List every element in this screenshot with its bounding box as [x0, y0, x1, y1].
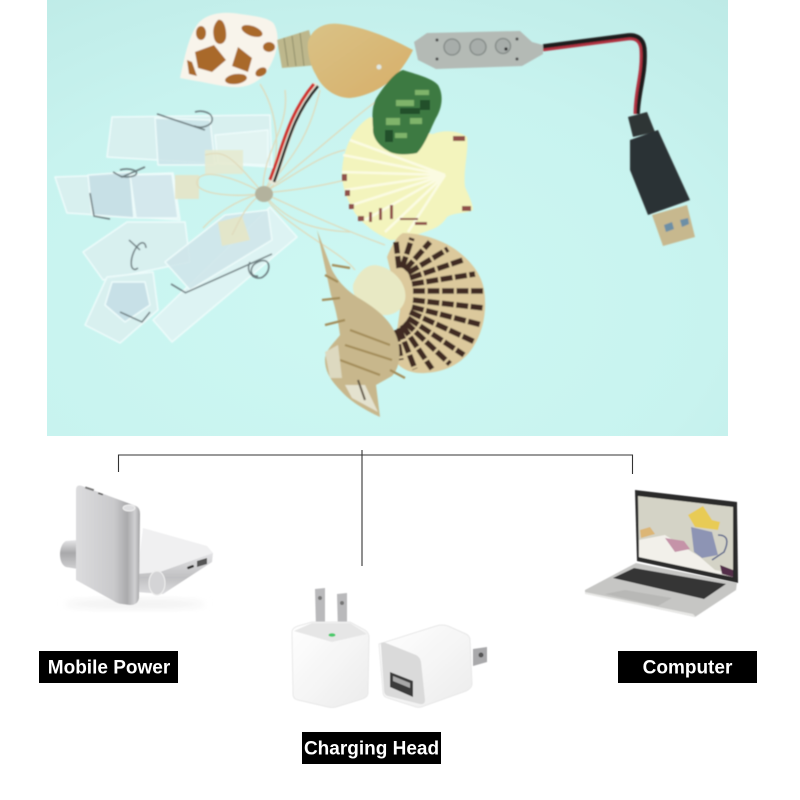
laptop screen [635, 490, 738, 583]
green shell [372, 70, 442, 154]
left charger [292, 588, 369, 708]
icon: charging heads [292, 588, 487, 708]
spiky shell [317, 230, 405, 417]
wire hub [255, 186, 273, 202]
keyboard [613, 568, 726, 599]
photo background [47, 0, 728, 436]
tan shell [277, 24, 413, 98]
label: Charging Head [302, 732, 441, 764]
brown scallop [353, 233, 485, 373]
rear cylinder [60, 540, 78, 569]
laptop base [585, 563, 737, 617]
lying power bank [137, 528, 213, 595]
label: Computer [618, 651, 757, 683]
inline controller [414, 31, 543, 69]
red and black cable [270, 84, 318, 184]
label: Charging Head: Charging Head [304, 738, 439, 760]
icon: power banks [60, 486, 213, 609]
thin wires [197, 84, 385, 270]
label: Mobile Power: Mobile Power [48, 658, 171, 678]
connector lines [118, 450, 632, 566]
USB plug [628, 112, 695, 246]
label: Computer: Computer [643, 658, 733, 678]
photo subjects [55, 13, 695, 417]
label: Mobile Power [39, 651, 178, 683]
upright power bank [76, 486, 140, 605]
right charger [379, 625, 487, 707]
product photo [47, 0, 728, 436]
clip springs [90, 111, 272, 322]
spotted shell [180, 13, 278, 87]
icon: laptop [585, 490, 738, 617]
yellow scallop [342, 117, 473, 240]
controller cable [543, 36, 644, 114]
clear clips [55, 115, 297, 343]
